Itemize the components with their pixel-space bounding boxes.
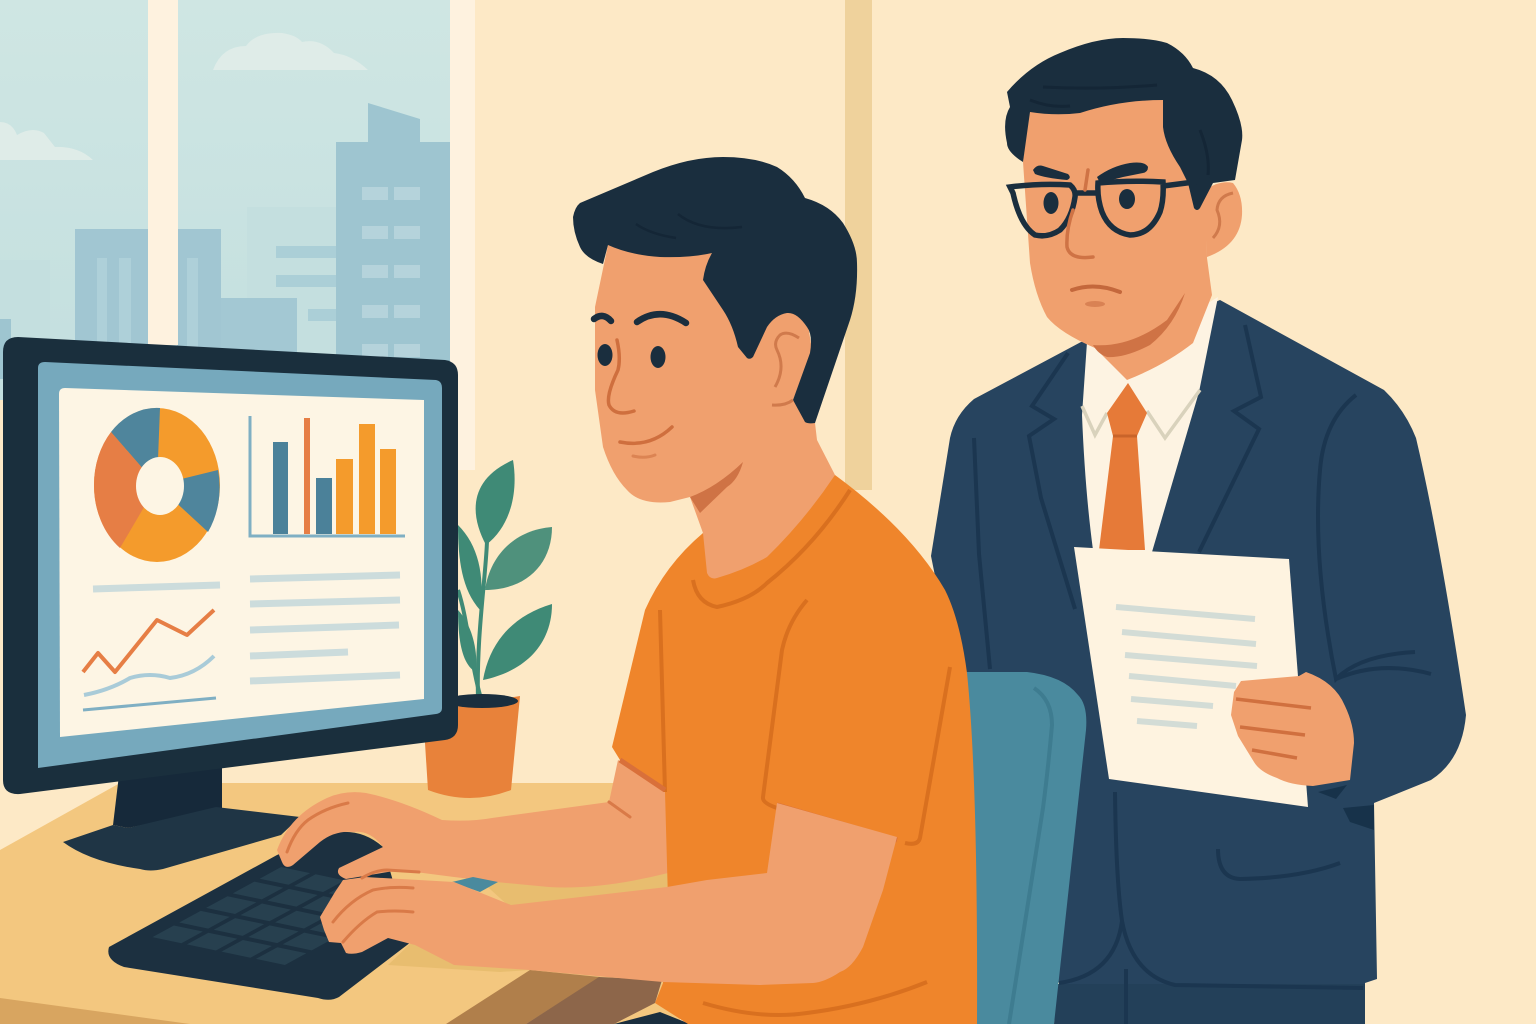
trousers [1054,984,1365,1024]
nose and mouth [1067,170,1093,258]
supervisor [931,38,1466,1024]
chart: bars [250,416,405,536]
shirt [612,475,977,1024]
hand shadows [1318,785,1374,830]
suit [931,300,1466,1024]
window with skyline [0,0,475,470]
desk [0,783,690,1024]
hair [1005,38,1242,210]
hand [1231,672,1354,786]
text lines [93,575,400,681]
potted plant [423,460,552,798]
front arm and hand [320,803,897,985]
keyboard [108,832,414,1000]
suit details [974,325,1431,1024]
ear [1205,182,1242,257]
shirt seams [660,490,950,1015]
computer monitor [3,337,458,870]
head and neck [595,245,835,578]
back arm and hand [277,760,668,887]
finger and arm creases [287,802,630,942]
neck and face [1023,100,1212,380]
chart: line [83,610,216,710]
shirt [1082,297,1218,552]
hair [573,157,857,423]
glasses [1010,180,1210,236]
chart: donut [94,408,220,562]
eyes and brows [1044,192,1058,214]
document [1074,547,1308,807]
document text lines [1116,607,1257,726]
tie [1099,383,1147,550]
mouse [452,877,498,892]
wall pillar [845,0,872,490]
employee [277,157,977,1024]
chin shadow [690,462,743,513]
chin shadow [1093,293,1185,357]
office chair [955,672,1086,1024]
face features [594,314,686,323]
